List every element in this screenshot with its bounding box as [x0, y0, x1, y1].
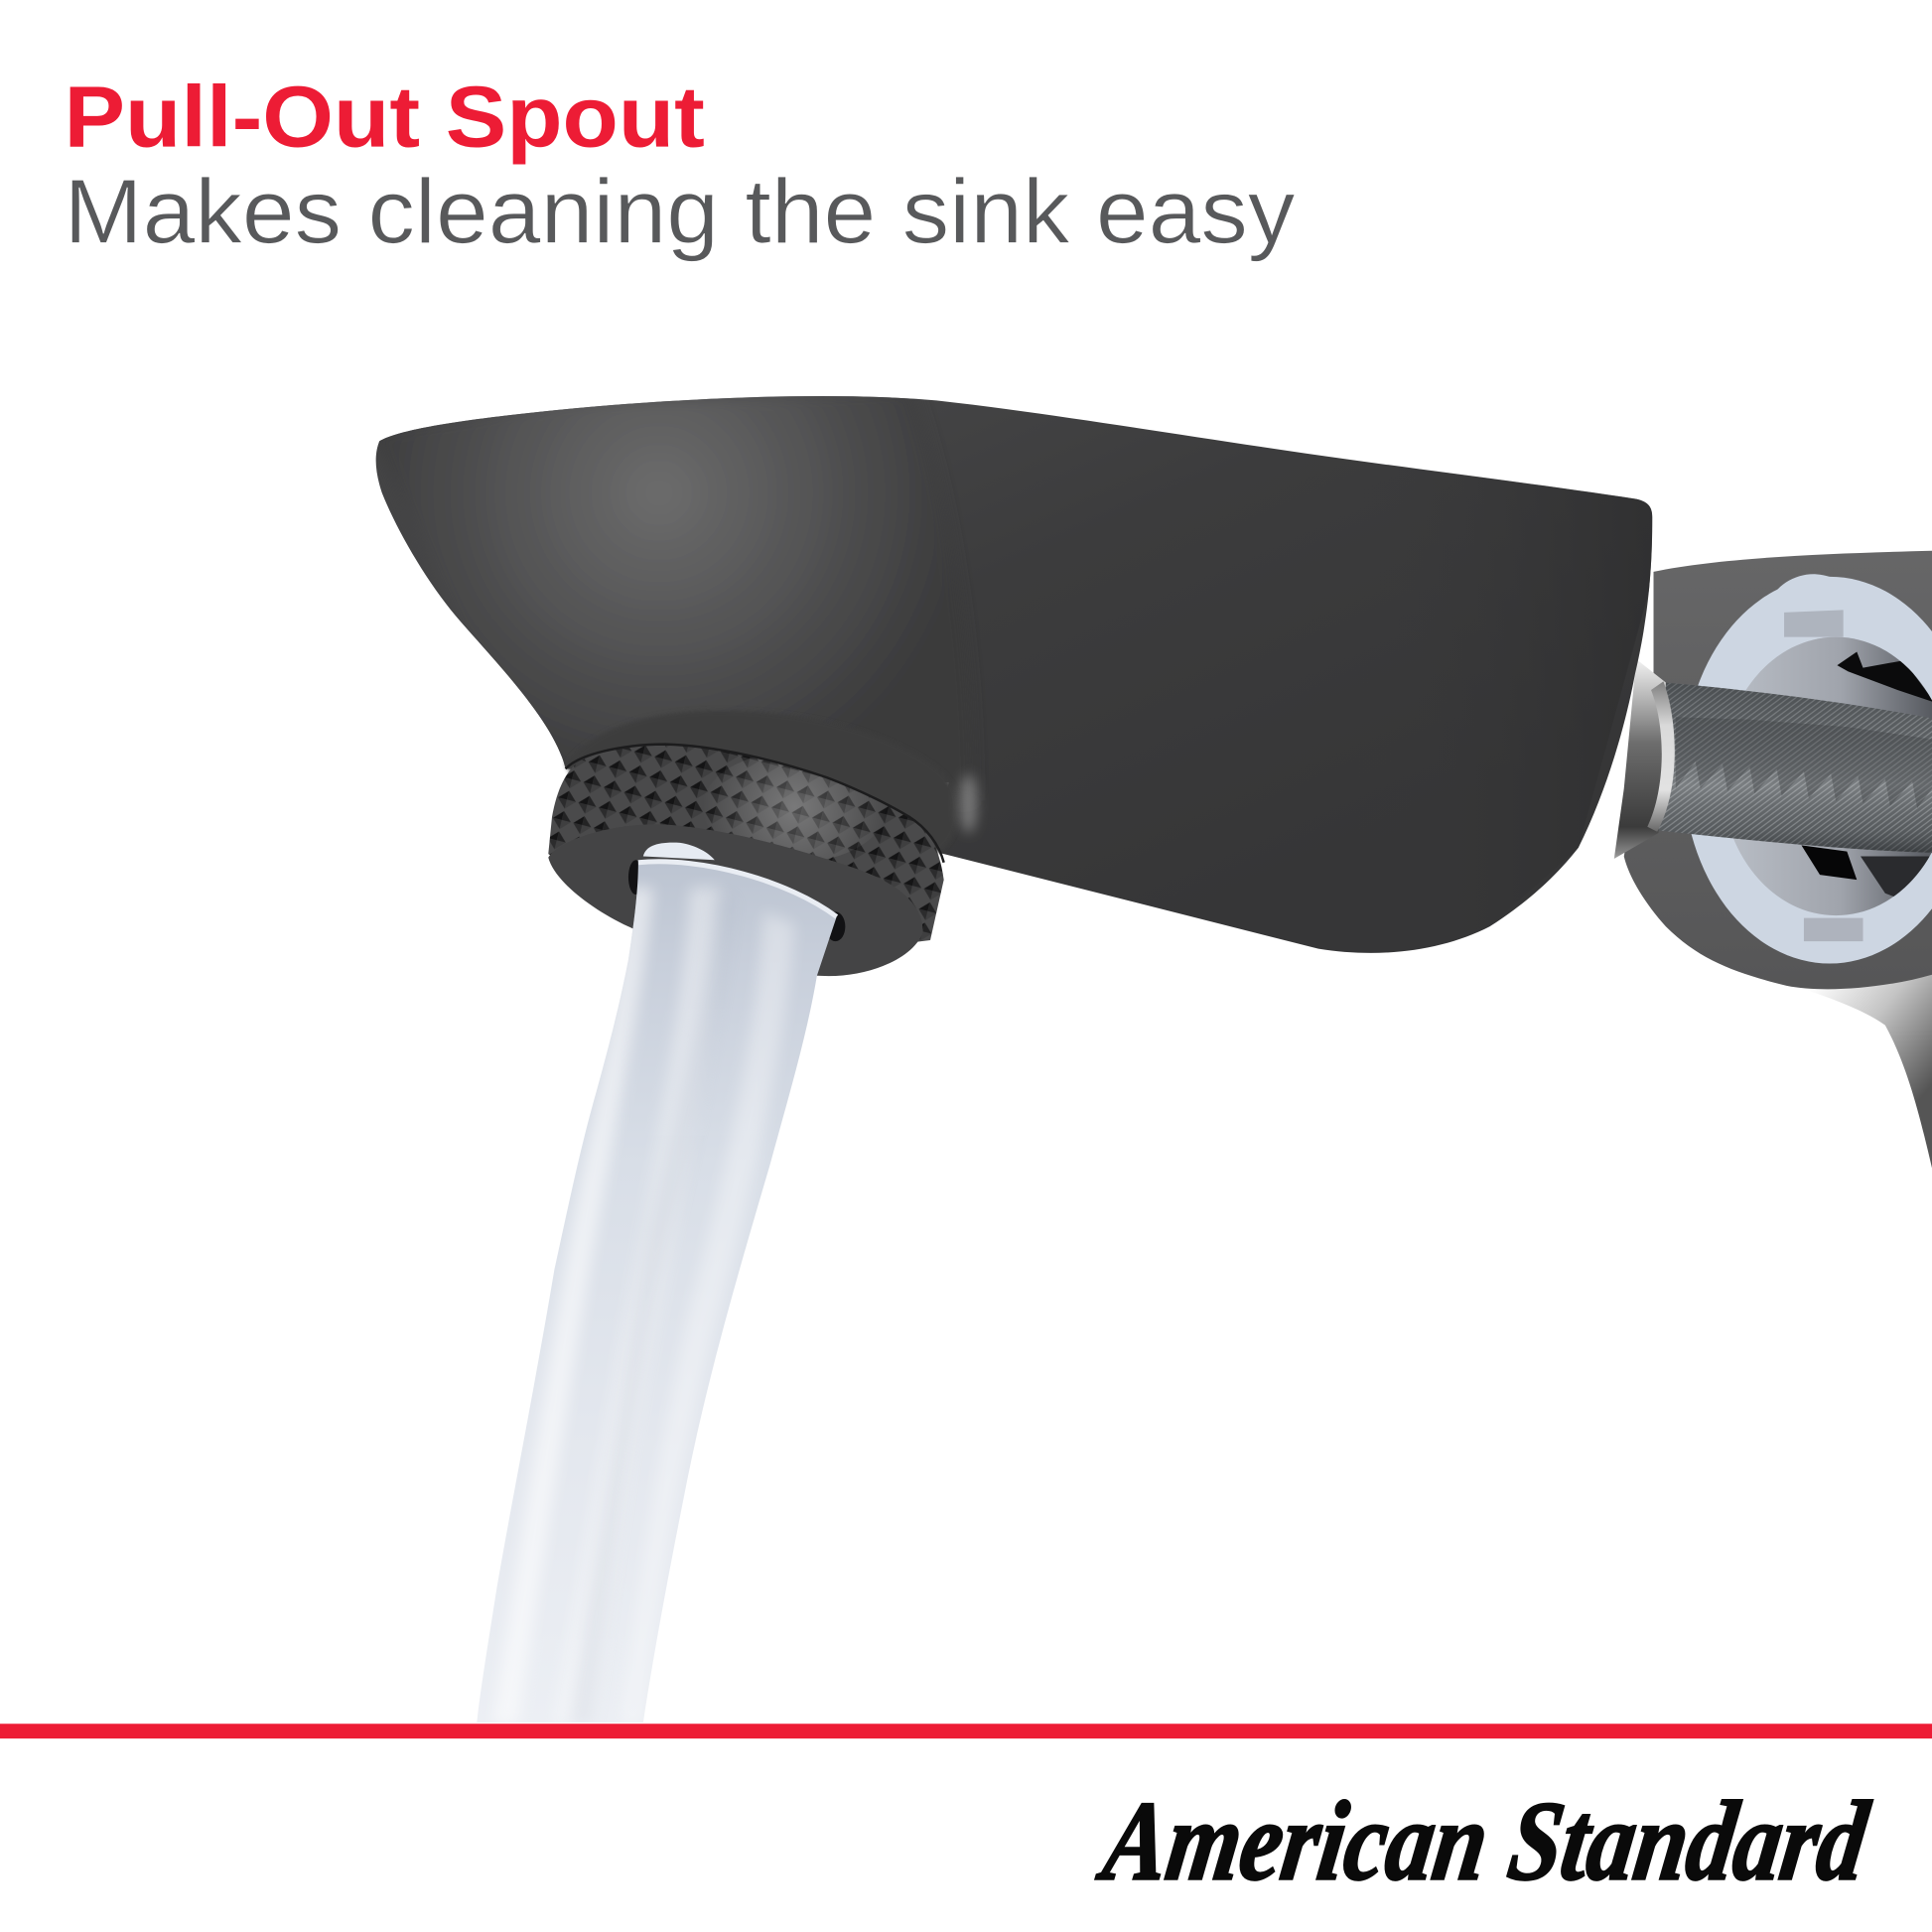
stem below bracket	[1787, 973, 1932, 1169]
hose shading	[1658, 683, 1932, 853]
metal hose fitting	[1614, 659, 1675, 859]
spout right shading	[1440, 472, 1652, 848]
red divider bar	[0, 1724, 1932, 1738]
mounting bracket	[1624, 551, 1932, 1169]
aerator neck collar	[566, 710, 977, 853]
braided hose	[1658, 683, 1932, 853]
collar highlight	[960, 773, 977, 833]
title: Pull-Out Spout	[65, 69, 705, 166]
spout bowl shading	[375, 396, 923, 767]
nozzle hole left	[628, 860, 643, 895]
braid sawtooth	[1676, 717, 1932, 808]
bracket plate	[1624, 551, 1932, 989]
nut bottom face	[548, 824, 923, 976]
nozzle tube	[643, 843, 715, 860]
water rim	[638, 862, 837, 916]
fitting collar ring	[1647, 681, 1675, 832]
ring bottom tab	[1804, 918, 1863, 941]
subtitle: Makes cleaning the sink easy	[65, 161, 1295, 262]
white retaining ring	[1683, 574, 1932, 964]
nozzle hole right	[826, 911, 845, 941]
water streaks	[492, 888, 794, 1725]
nut top edge	[566, 745, 944, 863]
ring top tab	[1784, 610, 1844, 637]
knurled aerator nut	[548, 745, 944, 976]
water stream	[477, 862, 837, 1725]
ring inner bore	[1722, 637, 1932, 915]
nut highlight	[715, 759, 874, 859]
spout body	[369, 388, 1652, 955]
